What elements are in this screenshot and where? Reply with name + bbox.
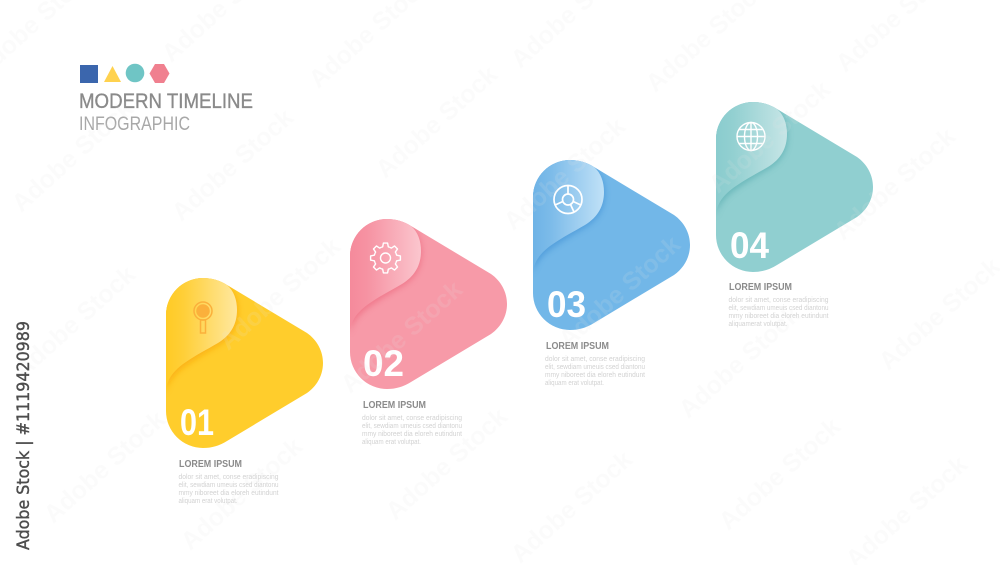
watermark pattern: Adobe Stock: [176, 432, 308, 556]
watermark pattern: Adobe Stock: [704, 75, 836, 199]
text: step 02: aliquam erat volutpat.: [362, 439, 421, 446]
watermark pattern: Adobe Stock: [39, 405, 171, 529]
text: step 03: mmy niboreet dia eloreh eutindunt: [545, 372, 645, 379]
title: INFOGRAPHIC: [79, 113, 190, 135]
text: step 02: dolor sit amet, conse eradipiscing: [362, 415, 462, 422]
text: step 04: aliquamerat volutpat.: [728, 321, 788, 328]
text: step 02: [362, 400, 462, 446]
watermark pattern: Adobe Stock: [9, 260, 141, 384]
text: step 03: dolor sit amet, conse eradipiscing: [545, 356, 645, 363]
text: step 01: [178, 459, 279, 505]
logo shapes: [80, 64, 170, 83]
watermark pattern: Adobe Stock: [371, 60, 503, 184]
text: step 04: mmy niboreet dia eloreh eutindunt: [728, 313, 829, 320]
step 02: [350, 219, 507, 389]
watermark pattern: Adobe Stock: [336, 275, 468, 399]
watermark pattern: Adobe Stock: [214, 232, 346, 356]
watermark pattern: Adobe Stock: [506, 445, 638, 565]
number 04: 04: [730, 225, 769, 266]
watermark pattern: Adobe Stock: [714, 412, 846, 536]
icon: gear: [371, 243, 400, 273]
watermark pattern: Adobe Stock: [499, 112, 631, 236]
title: [79, 90, 253, 135]
number 01: 01: [180, 402, 214, 443]
watermark pattern: Adobe Stock: [381, 402, 513, 526]
text: step 01: elit, sewdiam umeuis csed diantonu: [178, 482, 279, 489]
text: step 04: elit, sewdiam umeuis csed diantonu: [728, 305, 829, 312]
text: step 01: mmy niboreet dia eloreh eutindunt: [178, 490, 279, 497]
text: step 04: [728, 282, 829, 328]
text: step 03: LOREM IPSUM: [546, 341, 609, 352]
icon: globe: [737, 122, 765, 150]
icon: donut chart: [554, 186, 582, 214]
step 01: [166, 278, 323, 448]
title: MODERN TIMELINE: [79, 90, 253, 113]
text: step 02: mmy niboreet dia eloreh eutindunt: [362, 431, 462, 438]
number 02: 02: [363, 343, 404, 384]
watermark pattern: Adobe Stock: [554, 230, 686, 354]
text: step 01: LOREM IPSUM: [179, 459, 242, 470]
text: step 04: LOREM IPSUM: [729, 282, 792, 293]
step 04: [716, 102, 873, 272]
text: step 02: LOREM IPSUM: [363, 400, 426, 411]
watermark pattern: Adobe Stock: [674, 300, 806, 424]
number 03: 03: [547, 284, 586, 325]
text: step 03: aliquam erat volutpat.: [545, 380, 604, 387]
watermark pattern: Adobe Stock: [7, 94, 139, 218]
text: step 04: dolor sit amet, conse eradipiscing: [728, 297, 829, 304]
watermark pattern: Adobe Stock: [167, 103, 299, 227]
watermark pattern: Adobe Stock: [829, 122, 961, 246]
text: step 02: elit, sewdiam umeuis csed diantonu: [362, 423, 462, 430]
stock id label: Adobe Stock | #1119420989: [14, 321, 34, 550]
icon: magnifier: [194, 302, 212, 333]
step 03: [533, 160, 690, 330]
text: step 01: aliquam erat volutpat.: [178, 498, 238, 505]
text: step 03: elit, sewdiam umeuis csed diantonu: [545, 364, 645, 371]
text: step 01: dolor sit amet, conse eradipiscing: [178, 474, 279, 481]
text: step 03: [545, 341, 645, 387]
